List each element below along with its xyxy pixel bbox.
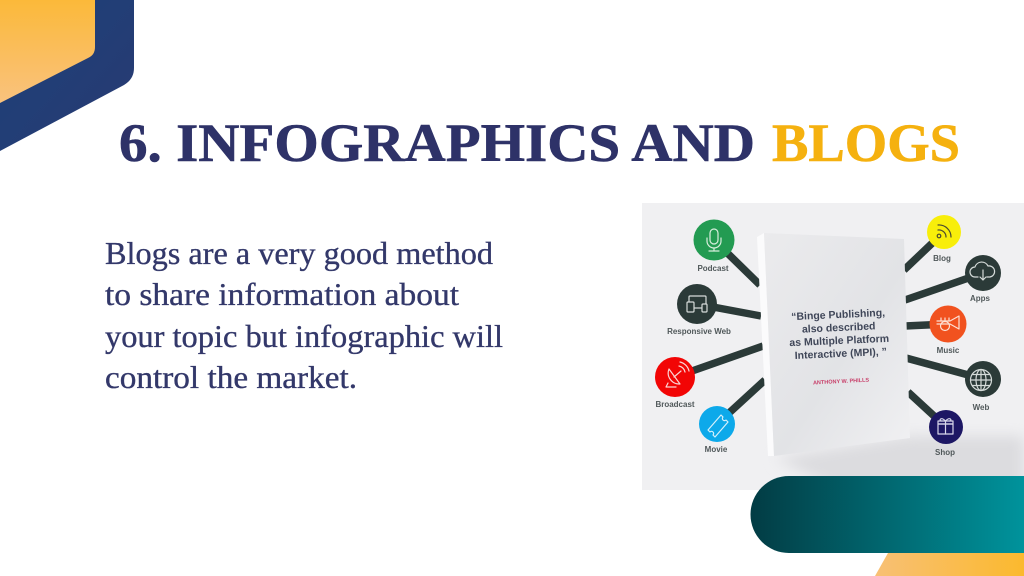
icon: responsive web <box>667 284 731 336</box>
icon: movie ticket: Movie <box>705 445 728 454</box>
book <box>757 233 910 456</box>
teal rounded bar <box>751 476 1024 553</box>
body text: Blogs are a very good method <box>105 235 493 271</box>
icon: blog: Blog <box>933 254 951 263</box>
corner decoration: navy and yellow pentagon <box>0 0 134 151</box>
title: 6. INFOGRAPHICS AND <box>119 113 755 173</box>
body text: control the market. <box>105 359 357 395</box>
connector lines <box>675 232 983 427</box>
icon: movie ticket <box>699 406 735 454</box>
icon: apps: Apps <box>970 294 991 303</box>
picture background <box>642 203 1024 490</box>
book title: as Multiple Platform <box>789 333 889 349</box>
body text <box>105 235 503 395</box>
title: BLOGS <box>772 113 960 173</box>
icon: music: Music <box>937 346 960 355</box>
icon: music <box>930 306 966 355</box>
icon: apps <box>965 255 1001 303</box>
icon: shop: Shop <box>935 448 955 457</box>
book author: ANTHONY W. PHILLS <box>813 378 870 386</box>
icon: web <box>965 361 1001 412</box>
body text: your topic but infographic will <box>105 318 503 354</box>
book title: also described <box>802 320 876 336</box>
book title <box>788 307 890 362</box>
icon: podcast: Podcast <box>697 264 729 273</box>
body text: to share information about <box>105 276 459 312</box>
icon: responsive web: Responsive Web <box>667 327 731 336</box>
icon: web: Web <box>973 403 989 412</box>
icon: blog <box>927 215 961 263</box>
icon: podcast <box>694 220 734 273</box>
icon: broadcast <box>655 357 695 409</box>
bottom yellow shape <box>875 553 1024 576</box>
book title: “Binge Publishing, <box>791 307 885 323</box>
book shadow <box>787 434 1024 476</box>
book title: Interactive (MPI), ” <box>795 346 887 362</box>
icon: broadcast: Broadcast <box>655 400 695 409</box>
picture: book with platform icons <box>642 203 1024 490</box>
icon: shop <box>929 410 963 457</box>
